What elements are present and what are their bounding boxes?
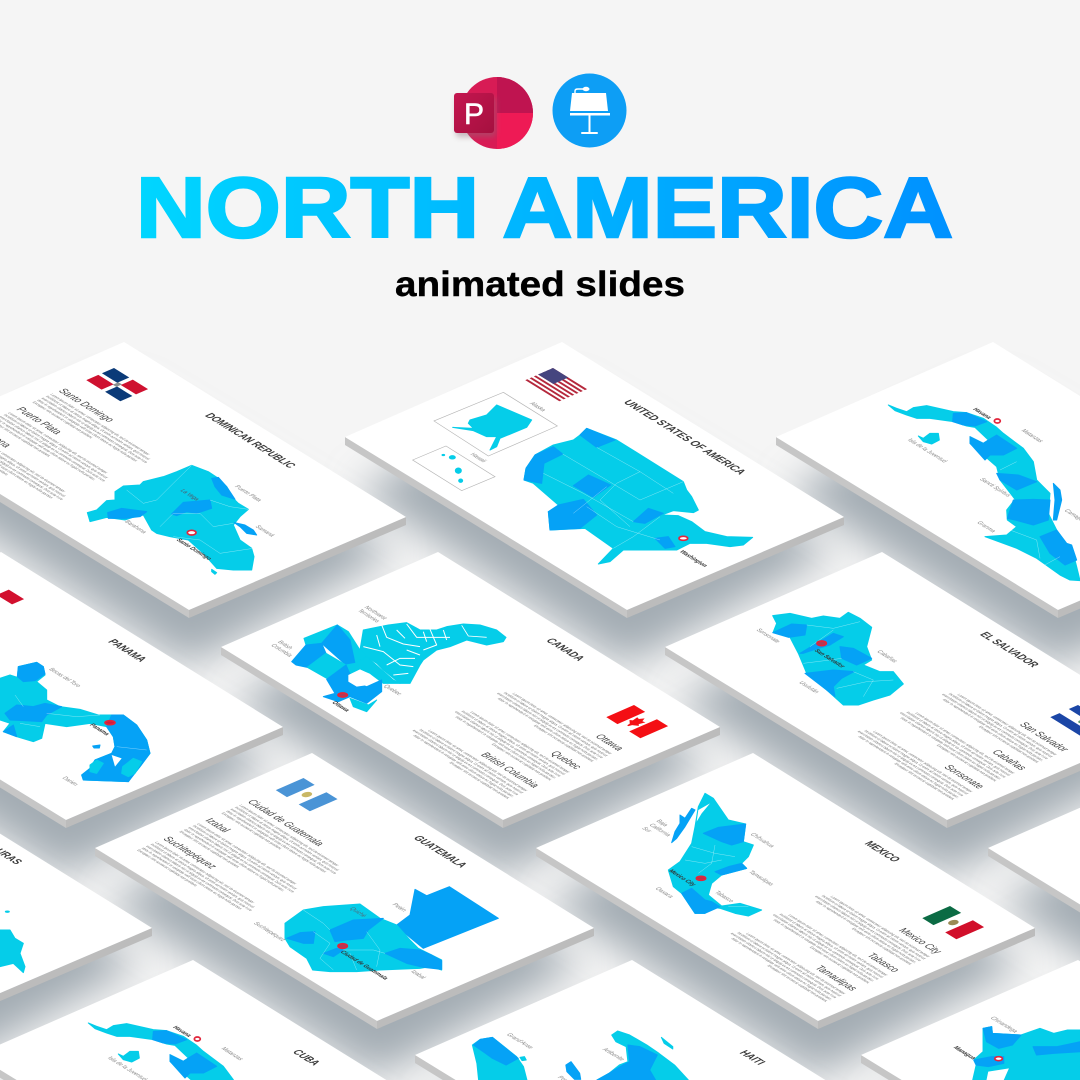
- icon: PowerPoint: P: [464, 98, 484, 131]
- text block: San Salvador: incididunt ut labore et dolore magna aliqua. Ut enim ad minim veniam, quis nostrud: [947, 693, 1054, 758]
- text block: Izabal: incididunt ut labore et dolore magna aliqua. Ut enim ad minim veniam, quis nostrud: [191, 825, 298, 890]
- panel: Honduras slide: [0, 753, 152, 1029]
- text block: Quebec: Excepteur sint occaecat cupidatat non proident.: [490, 743, 553, 781]
- map: Canada: Northwest: [362, 606, 388, 621]
- text block: Ciudad de Guatemala: Excepteur sint occaecat cupidatat non proident.: [220, 812, 283, 850]
- text block: Ciudad de Guatemala: exercitation ullamco laboris nisi ut aliquip ex ea commodo consequat. Duis aute irure: [229, 808, 338, 875]
- text block: Ottawa: Lorem ipsum dolor sit amet, consectetur adipiscing elit, sed do eiusmod tempor: [511, 692, 614, 755]
- map: Nicaragua: Managua: [951, 1045, 978, 1061]
- text block: Sonsonate: Excepteur sint occaecat cupidatat non proident.: [893, 762, 956, 801]
- map: Dominican Republic: Santo Domingo: [174, 538, 213, 561]
- map: Honduras: [0, 911, 25, 973]
- text block: Quebec: Quebec: [547, 750, 584, 771]
- map: Cuba: Granma: [975, 521, 997, 534]
- map: Haiti: [472, 1031, 688, 1080]
- map: Canada: Ottawa: [330, 701, 351, 713]
- slide title: CUBA: [289, 1049, 323, 1067]
- map: Canada: Columbia: [269, 644, 294, 658]
- map: Panama: Bocas del Toro: [47, 668, 82, 689]
- text block: Mexico City: dolor in reprehenderit in voluptate velit esse cillum dolore eu fugiat nulla pariatur.: [814, 900, 918, 964]
- text block: Ottawa: [487, 683, 627, 763]
- text block: Cabañas: Lorem ipsum dolor sit amet, consectetur adipiscing elit, sed do eiusmod tempor: [914, 712, 1016, 775]
- map: El Salvador: Sonsonate: [754, 628, 782, 644]
- text block: Tamaulipas: Excepteur sint occaecat cupidatat non proident.: [766, 964, 829, 1003]
- panel: United States slide: [345, 342, 844, 618]
- text block: Sonsonate: incididunt ut labore et dolore magna aliqua. Ut enim ad minim veniam, quis nostrud: [863, 730, 969, 795]
- map: Cuba: Havana: [971, 408, 993, 420]
- text block: Barahona: [0, 424, 86, 505]
- text block: Ciudad de Guatemala: dolor in reprehenderit in voluptate velit esse cillum dolore eu fugiat nulla pariatur.: [225, 810, 328, 873]
- text block: San Salvador: [932, 684, 1072, 764]
- text block: Mexico City: [805, 886, 945, 966]
- map: Dominican Republic: La Vega: [178, 489, 201, 502]
- map: Mexico: Chihuahua: [748, 833, 776, 849]
- icon: Keynote: [552, 74, 626, 148]
- map: Cuba, bottom row: Havana: [171, 1026, 193, 1038]
- map: United States: Washington: [677, 550, 709, 568]
- text block: Sonsonate: dolor in reprehenderit in voluptate velit esse cillum dolore eu fugiat nulla pariatur.: [857, 735, 960, 799]
- text block: Santo Domingo: Lorem ipsum dolor sit amet, consectetur adipiscing elit, sed do eiusmod tempor: [49, 393, 151, 456]
- text block: Sonsonate: Lorem ipsum dolor sit amet, consectetur adipiscing elit, sed do eiusmod tempor: [872, 730, 974, 793]
- text block: Santo Domingo: dolor in reprehenderit in voluptate velit esse cillum dolore eu fugiat nulla pariatur.: [36, 399, 139, 462]
- map: Cuba, bottom row: [88, 1023, 280, 1080]
- text block: Ottawa: incididunt ut labore et dolore magna aliqua. Ut enim ad minim veniam, quis nostrud: [502, 692, 609, 757]
- panel: El Salvador slide: [665, 552, 1080, 828]
- text block: Sonsonate: Sonsonate: [940, 764, 987, 791]
- flag: Guatemala: [276, 778, 338, 811]
- flag: Dominican Republic: [86, 368, 148, 401]
- text block: Ottawa: Excepteur sint occaecat cupidatat non proident.: [533, 724, 595, 763]
- text block: Cabañas: Excepteur sint occaecat cupidatat non proident.: [935, 744, 998, 782]
- map: Canada: Quebec: [381, 684, 403, 696]
- text block: Puerto Plata: Lorem ipsum dolor sit amet, consectetur adipiscing elit, sed do eiusmod tempor: [7, 412, 109, 475]
- map: Cuba: Matanzas: [1019, 429, 1044, 443]
- inset: Hawaii: Hawaii: [468, 453, 487, 463]
- text block: Cabañas: exercitation ullamco laboris nisi ut aliquip ex ea commodo consequat. Duis aute irure: [898, 712, 1007, 778]
- text block: Tamaulipas: dolor in reprehenderit in voluptate velit esse cillum dolore eu fugiat nulla pariatur.: [730, 937, 833, 1001]
- text block: British Columbia: Excepteur sint occaecat cupidatat non proident.: [448, 761, 511, 800]
- slide title: MEXICO: [861, 840, 902, 864]
- text block: Sonsonate: [847, 721, 987, 801]
- text block: Tabasco: exercitation ullamco laboris nisi ut aliquip ex ea commodo consequat. Duis aute irure: [771, 914, 880, 980]
- map: Mexico: [640, 793, 776, 916]
- text block: Quebec: Lorem ipsum dolor sit amet, consectetur adipiscing elit, sed do eiusmod tempor: [469, 711, 571, 774]
- map: Cuba, bottom row: Matanzas: [219, 1047, 244, 1061]
- map: Mexico: California: [647, 823, 672, 838]
- slide title: EL SALVADOR: [976, 631, 1041, 669]
- text block: Quebec: dolor in reprehenderit in voluptate velit esse cillum dolore eu fugiat nulla pariatur.: [454, 716, 558, 779]
- text block: Suchitepéquez: [136, 835, 275, 916]
- text block: Ciudad de Guatemala: incididunt ut labore et dolore magna aliqua. Ut enim ad minim veniam, quis nostrud: [234, 806, 340, 871]
- map: Mexico: Baja: [654, 819, 669, 828]
- map: Mexico: Tamaulipas: [746, 870, 775, 887]
- panel: Mexico slide: [536, 753, 1035, 1029]
- panel: Haiti slide: [415, 960, 914, 1080]
- text block: Suchitepéquez: dolor in reprehenderit in voluptate velit esse cillum dolore eu fugiat nulla pariatur.: [140, 847, 244, 910]
- map: Panama: Darién: [60, 776, 79, 787]
- text block: Puerto Plata: [0, 406, 128, 486]
- text block: Izabal: exercitation ullamco laboris nisi ut aliquip ex ea commodo consequat. Duis aute irure: [187, 827, 295, 893]
- icon: PowerPoint: [454, 77, 533, 149]
- map: Haiti: Grand'Anse: [504, 1032, 536, 1050]
- text block: British Columbia: Lorem ipsum dolor sit amet, consectetur adipiscing elit, sed do eiusmod tempor: [427, 729, 529, 792]
- text block: Santo Domingo: Excepteur sint occaecat cupidatat non proident.: [31, 401, 94, 439]
- text block: Tabasco: Excepteur sint occaecat cupidatat non proident.: [808, 946, 871, 984]
- title: NORTH AMERICA: [136, 161, 953, 256]
- panel: right edge slide: [988, 753, 1080, 1029]
- flag: Canada: [606, 705, 668, 738]
- text block: San Salvador: dolor in reprehenderit in voluptate velit esse cillum dolore eu fugiat nulla pariatur.: [941, 698, 1045, 762]
- text block: Ottawa: dolor in reprehenderit in voluptate velit esse cillum dolore eu fugiat nulla pariatur.: [496, 697, 600, 761]
- map: El Salvador: Cabañas: [875, 650, 898, 663]
- flag: United States: [525, 368, 587, 401]
- flag: Panama: [0, 590, 24, 604]
- text block: Quebec: incididunt ut labore et dolore magna aliqua. Ut enim ad minim veniam, quis nostrud: [460, 710, 566, 775]
- text block: Ciudad de Guatemala: Ciudad de Guatemala: [244, 798, 327, 848]
- text block: Tabasco: Lorem ipsum dolor sit amet, consectetur adipiscing elit, sed do eiusmod tempor: [787, 914, 889, 977]
- text block: Cabañas: dolor in reprehenderit in voluptate velit esse cillum dolore eu fugiat nulla pariatur.: [899, 717, 1003, 780]
- text block: Cabañas: incididunt ut labore et dolore magna aliqua. Ut enim ad minim veniam, quis nostrud: [905, 711, 1011, 776]
- text block: Tabasco: [763, 904, 902, 985]
- map: Cuba: Sancti Spíritus: [977, 478, 1012, 498]
- text block: British Columbia: dolor in reprehenderit in voluptate velit esse cillum dolore eu fugiat nulla pariatur.: [412, 734, 515, 798]
- map: Canada: [269, 606, 506, 713]
- text block: Tabasco: Tabasco: [863, 952, 902, 974]
- map: United States: [413, 392, 753, 568]
- text block: Mexico City: incididunt ut labore et dolore magna aliqua. Ut enim ad minim veniam, quis nostrud: [820, 895, 927, 960]
- map: Guatemala: Petén: [390, 903, 408, 913]
- map: Dominican Republic: Barahona: [122, 520, 148, 535]
- map: Dominican Republic: [87, 465, 276, 574]
- text block: Mexico City: Lorem ipsum dolor sit amet, consectetur adipiscing elit, sed do eiusmod tempor: [829, 895, 932, 958]
- map: Guatemala: Suchitepéquez: [251, 922, 286, 942]
- map: Nicaragua: Chinandega: [988, 1016, 1020, 1034]
- text block: Tamaulipas: exercitation ullamco laboris nisi ut aliquip ex ea commodo consequat. Duis aute irure: [729, 932, 838, 999]
- panel: Cuba slide: [776, 342, 1080, 618]
- text block: Ottawa: Ottawa: [592, 733, 627, 753]
- text block: British Columbia: incididunt ut labore et dolore magna aliqua. Ut enim ad minim veniam, quis nostrud: [418, 729, 524, 794]
- map: Mexico: Sur: [640, 827, 653, 833]
- text block: Santo Domingo: [31, 387, 171, 468]
- text block: British Columbia: exercitation ullamco laboris nisi ut aliquip ex ea commodo consequat. Duis aute irure: [411, 729, 520, 796]
- text block: Izabal: dolor in reprehenderit in voluptate velit esse cillum dolore eu fugiat nulla pariatur.: [182, 828, 286, 892]
- text block: Suchitepéquez: incididunt ut labore et dolore magna aliqua. Ut enim ad minim veniam, quis nostrud: [149, 843, 256, 908]
- text block: Santo Domingo: exercitation ullamco laboris nisi ut aliquip ex ea commodo consequat. Duis aute irure: [40, 397, 149, 464]
- panel: Guatemala slide: [95, 753, 594, 1029]
- slide title: GUATEMALA: [410, 835, 470, 870]
- map: El Salvador: [754, 612, 903, 705]
- slide title: UNITED STATES OF AMERICA: [620, 399, 748, 477]
- map: Mexico: Oaxaca: [653, 887, 675, 899]
- text block: Mexico City: Mexico City: [895, 927, 944, 955]
- text block: Suchitepéquez: exercitation ullamco laboris nisi ut aliquip ex ea commodo consequat. Duis aute irure: [145, 845, 253, 912]
- map: Guatemala: Quiché: [347, 907, 368, 919]
- text block: Ciudad de Guatemala: [220, 798, 360, 879]
- text block: Cabañas: [890, 702, 1029, 783]
- panel: Dominican Republic slide: [0, 342, 406, 618]
- map: Mexico: Tabasco: [712, 891, 735, 904]
- map: Canada: British: [275, 640, 294, 650]
- map: Canada: Territories: [355, 609, 381, 624]
- subtitle: animated slides: [395, 265, 685, 304]
- text block: Tabasco: incididunt ut labore et dolore magna aliqua. Ut enim ad minim veniam, quis nostrud: [778, 913, 884, 978]
- text block: San Salvador: Excepteur sint occaecat cupidatat non proident.: [978, 725, 1040, 764]
- text block: British Columbia: British Columbia: [477, 751, 542, 790]
- slide title: CANADA: [542, 637, 587, 663]
- text block: Tabasco: dolor in reprehenderit in voluptate velit esse cillum dolore eu fugiat nulla pariatur.: [772, 919, 876, 982]
- panel: Canada slide: [221, 552, 720, 828]
- text block: San Salvador: Lorem ipsum dolor sit amet, consectetur adipiscing elit, sed do eiusmod tempor: [956, 693, 1059, 756]
- map: El Salvador: San Salvador: [812, 649, 846, 669]
- slide title: DOMINICAN REPUBLIC: [201, 412, 298, 470]
- text block: Suchitepéquez: Excepteur sint occaecat cupidatat non proident.: [136, 849, 199, 887]
- map: Nicaragua: [951, 1016, 1080, 1080]
- inset: Alaska: Alaska: [527, 402, 547, 413]
- text block: Quebec: [445, 701, 584, 782]
- text block: San Salvador: San Salvador: [1016, 721, 1072, 754]
- slide title: HAITI: [736, 1049, 767, 1067]
- map: Cuba: [888, 405, 1080, 581]
- map: Dominican Republic: Puerto Plata: [232, 485, 263, 503]
- text block: British Columbia: [402, 720, 542, 800]
- map: Guatemala: Izabal: [409, 970, 426, 980]
- map: Haiti: Artibonite: [600, 1047, 627, 1062]
- text block: Puerto Plata: Puerto Plata: [13, 406, 65, 436]
- text block: Izabal: Lorem ipsum dolor sit amet, consectetur adipiscing elit, sed do eiusmod tempor: [196, 823, 298, 886]
- text block: Tamaulipas: [720, 923, 860, 1003]
- text block: Puerto Plata: exercitation ullamco laboris nisi ut aliquip ex ea commodo consequat. Duis aute irure: [0, 416, 106, 482]
- map: Mexico: Mexico City: [666, 869, 697, 887]
- text block: Santo Domingo: incididunt ut labore et dolore magna aliqua. Ut enim ad minim veniam, quis nostrud: [45, 395, 151, 460]
- panel: Panama slide: [0, 552, 283, 828]
- panel: Cuba slide, bottom row: [0, 960, 475, 1080]
- text block: Izabal: [178, 817, 317, 897]
- text block: Ciudad de Guatemala: Lorem ipsum dolor sit amet, consectetur adipiscing elit, sed do eiusmod tempor: [238, 804, 340, 867]
- slide title: PANAMA: [104, 638, 149, 664]
- text block: San Salvador: exercitation ullamco laboris nisi ut aliquip ex ea commodo consequat. Duis aute irure: [941, 693, 1049, 760]
- text block: Suchitepéquez: Suchitepéquez: [160, 835, 219, 870]
- map: Guatemala: Ciudad de Guatemala: [338, 950, 389, 981]
- inset: Alaska: [434, 392, 557, 456]
- text block: Sonsonate: exercitation ullamco laboris nisi ut aliquip ex ea commodo consequat. Duis aute irure: [856, 730, 965, 797]
- flag: Mexico: [922, 906, 984, 939]
- text block: Mexico City: exercitation ullamco laboris nisi ut aliquip ex ea commodo consequat. Duis aute irure: [814, 895, 922, 962]
- flag: El Salvador: [1050, 705, 1080, 738]
- text block: Tamaulipas: Tamaulipas: [811, 964, 860, 992]
- map: El Salvador: Usulután: [797, 681, 820, 694]
- map: Panama: Panama: [87, 723, 111, 737]
- text block: Ottawa: exercitation ullamco laboris nisi ut aliquip ex ea commodo consequat. Duis aute irure: [496, 692, 604, 759]
- panel: Nicaragua slide: [861, 960, 1080, 1080]
- text block: Suchitepéquez: Lorem ipsum dolor sit amet, consectetur adipiscing elit, sed do eiusmod tempor: [154, 841, 256, 904]
- text block: Santo Domingo: Santo Domingo: [55, 387, 117, 424]
- text block: Izabal: Izabal: [202, 817, 233, 834]
- map: Panama: [0, 662, 150, 787]
- text block: Tamaulipas: incididunt ut labore et dolore magna aliqua. Ut enim ad minim veniam, quis nostrud: [736, 932, 842, 997]
- text block: Izabal: Excepteur sint occaecat cupidatat non proident.: [178, 830, 241, 869]
- text block: Quebec: exercitation ullamco laboris nisi ut aliquip ex ea commodo consequat. Duis aute irure: [453, 711, 562, 777]
- map: Guatemala: [251, 887, 498, 981]
- map: Dominican Republic: Samaná: [253, 525, 276, 538]
- map: Cuba: Isla de la Juventud: [905, 438, 948, 464]
- inset: Hawaii: [413, 446, 495, 491]
- text block: Cabañas: Cabañas: [988, 749, 1029, 772]
- text block: Puerto Plata: incididunt ut labore et dolore magna aliqua. Ut enim ad minim veniam, quis nostrud: [2, 414, 109, 479]
- text block: Tamaulipas: Lorem ipsum dolor sit amet, consectetur adipiscing elit, sed do eiusmod tempor: [745, 932, 847, 995]
- text block: Mexico City: Excepteur sint occaecat cupidatat non proident.: [851, 927, 913, 966]
